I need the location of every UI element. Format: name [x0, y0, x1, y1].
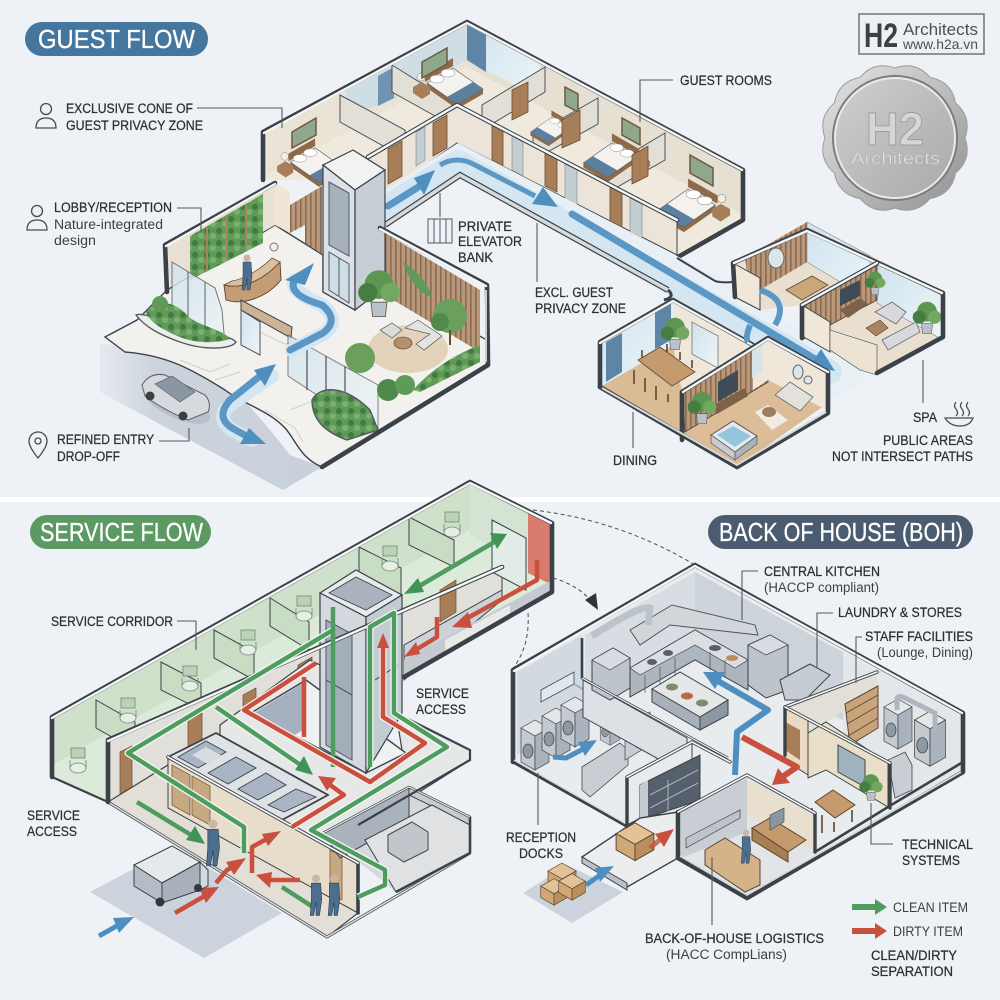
- divider band between guest and service halves: [0, 497, 1000, 502]
- living lounge wall and floor: [682, 338, 827, 460]
- dock: [523, 812, 678, 923]
- label: service access left: ACCESS: [27, 824, 77, 839]
- label: private elevator bank: BANK: [458, 250, 493, 265]
- label: technical systems: TECHNICAL: [902, 837, 973, 852]
- label: refined entry: [29, 428, 189, 464]
- label: refined entry: REFINED ENTRY: [57, 432, 154, 447]
- label: service access left: SERVICE: [27, 808, 80, 823]
- label: staff facilities: STAFF FACILITIES: [865, 629, 973, 644]
- staff dining table: [812, 774, 883, 833]
- arrow: laundry flow: [553, 740, 597, 758]
- icon: elevator: [428, 219, 452, 243]
- arrow: truck approach: [99, 917, 134, 936]
- panel: service flow building: [52, 482, 552, 958]
- kitchen island: [652, 672, 728, 717]
- plants and lounge furniture: [345, 262, 480, 401]
- central floor and courtyard: [220, 660, 470, 850]
- label: reception docks: DOCKS: [519, 846, 563, 861]
- badge: silver seal: H2: [866, 103, 924, 155]
- label: lobby reception: [27, 200, 201, 248]
- dining table: [634, 344, 695, 402]
- bottom L floor and beige wall: [108, 765, 358, 937]
- outer wall tops: [263, 22, 743, 257]
- legend: clean and dirty items: DIRTY ITEM: [893, 924, 963, 939]
- icon: spa bowl with steam: [945, 402, 973, 426]
- label: spa and public areas: PUBLIC AREAS: [883, 433, 973, 448]
- room dividers: [340, 65, 665, 198]
- logo: H2 Architects box: Architects: [903, 20, 978, 39]
- back wall with green wall: [165, 183, 275, 285]
- arrow: dirty item: [852, 923, 887, 939]
- badge: silver seal: [823, 66, 967, 210]
- panel: public areas block (lounge): [733, 222, 943, 375]
- label: service corridor: [51, 614, 196, 650]
- label: exclusive cone zone: [36, 101, 282, 133]
- corridor face wall: [108, 567, 502, 810]
- planter right: [312, 390, 378, 440]
- planter left: [136, 314, 236, 348]
- arrow: corridor flow: [388, 160, 835, 371]
- icon: guest person: [36, 104, 56, 128]
- staff facilities: [785, 673, 945, 798]
- label: service access left: [27, 808, 80, 839]
- icon: receptionist: [27, 206, 47, 230]
- label: laundry and stores: LAUNDRY & STORES: [838, 605, 962, 620]
- tower: [320, 570, 402, 773]
- label: exclusive guest privacy zone: EXCL. GUEST: [535, 285, 613, 300]
- glass front: [172, 262, 225, 345]
- label: private elevator bank: [428, 193, 522, 265]
- label: service access right: ACCESS: [416, 702, 466, 717]
- label: service access right: SERVICE: [416, 686, 469, 701]
- label: lobby reception: design: [54, 233, 96, 248]
- logo: H2 Architects box: H2: [864, 17, 898, 55]
- label: dining: DINING: [613, 453, 657, 468]
- kitchen flow arrows: [703, 672, 797, 785]
- label: technical systems: SYSTEMS: [902, 853, 960, 868]
- lower right plant box: [323, 787, 470, 892]
- label: service access right: [416, 686, 469, 717]
- people: [206, 820, 340, 915]
- label: reception docks: [506, 773, 576, 861]
- label: guest rooms: GUEST ROOMS: [680, 73, 772, 88]
- label: dining: [613, 412, 657, 468]
- green clean path: [128, 533, 507, 907]
- store shelves: [627, 742, 700, 825]
- label: private elevator bank: ELEVATOR: [458, 234, 522, 249]
- plant: dining: [661, 318, 689, 350]
- arrow: dock in: [586, 873, 603, 885]
- arrow: entry flow: [223, 263, 332, 444]
- logo: H2 Architects box: [859, 14, 984, 55]
- label: exclusive guest privacy zone: PRIVACY ZONE: [535, 301, 626, 316]
- panel: public areas block (dining and spa): [600, 300, 828, 467]
- red dirty path: [175, 560, 537, 913]
- label: lobby reception: Nature-integrated: [54, 217, 163, 232]
- dashed link from service flow to back of house: [514, 510, 695, 667]
- beds: [277, 58, 730, 232]
- label: spa and public areas: NOT INTERSECT PATHS: [832, 449, 973, 464]
- road drop-off area: [100, 343, 322, 490]
- label: central kitchen: (HACCP compliant): [764, 580, 879, 595]
- arrow: clean item: [852, 899, 887, 915]
- label: guest rooms: [640, 73, 772, 122]
- label: spa and public areas: SPA: [913, 410, 937, 425]
- elevator tower: [323, 150, 385, 310]
- legend: clean and dirty items: CLEAN ITEM: [893, 900, 968, 915]
- label: service corridor: SERVICE CORRIDOR: [51, 614, 173, 629]
- wood feature wall right: [380, 230, 480, 352]
- beige staff partition: [808, 722, 888, 807]
- badge: silver seal: Architects: [851, 149, 940, 168]
- window room right end: [492, 520, 526, 590]
- lower right wing: [404, 580, 552, 677]
- panel: lobby and reception: [100, 150, 488, 490]
- legend: clean and dirty items: SEPARATION: [871, 964, 953, 979]
- reception desk: [224, 243, 281, 302]
- legend: clean and dirty items: CLEAN/DIRTY: [871, 948, 957, 963]
- lounge furniture: [768, 248, 941, 350]
- toilet fixtures: [70, 512, 460, 773]
- label: staff facilities: [856, 629, 973, 683]
- label: back-of-house logistics: BACK-OF-HOUSE LOGISTICS: [645, 931, 824, 946]
- wall artworks: [292, 48, 713, 186]
- label: lobby reception: LOBBY/RECEPTION: [54, 200, 172, 215]
- label: spa and public areas: [832, 360, 973, 464]
- label: private elevator bank: PRIVATE: [458, 219, 512, 234]
- arrow: dock to office: [650, 838, 662, 848]
- label: technical systems: [871, 803, 973, 868]
- walls: [513, 565, 963, 898]
- label: back-of-house logistics: [645, 857, 824, 962]
- hot tub: [711, 421, 757, 460]
- laundry room: [521, 672, 650, 797]
- panel: back of house plan: [513, 565, 963, 923]
- label: central kitchen: CENTRAL KITCHEN: [764, 564, 880, 579]
- label: refined entry: DROP-OFF: [57, 449, 120, 464]
- office: [678, 775, 815, 898]
- label: staff facilities: (Lounge, Dining): [877, 645, 973, 660]
- delivery truck: [134, 846, 208, 906]
- ground under truck: [90, 847, 282, 958]
- label: central kitchen: [742, 564, 880, 620]
- car: [138, 374, 216, 432]
- title: service flow pill: SERVICE FLOW: [40, 517, 203, 547]
- wing floor and back wall: [52, 482, 552, 802]
- marble floor: [105, 225, 488, 467]
- dividers: [96, 517, 454, 750]
- label: laundry and stores: [817, 605, 962, 667]
- arrowhead of dashed link: [585, 593, 598, 610]
- entrance canopy and glazing: [241, 300, 378, 435]
- title: guest flow pill: GUEST FLOW: [38, 24, 195, 54]
- legend: clean and dirty items: [852, 899, 968, 979]
- label: exclusive guest privacy zone: [535, 223, 626, 316]
- laundry-kitchen wall: [583, 680, 687, 775]
- label: reception docks: RECEPTION: [506, 830, 576, 845]
- corridor wall with doors: [368, 105, 677, 255]
- label: exclusive cone zone: EXCLUSIVE CONE OF: [66, 101, 193, 116]
- label: back-of-house logistics: (HACC CompLians): [666, 947, 787, 962]
- panel: guest rooms wing: [263, 22, 743, 257]
- wing outer walls: [52, 482, 552, 777]
- label: exclusive cone zone: GUEST PRIVACY ZONE: [66, 118, 203, 133]
- building outer walls: [165, 183, 275, 292]
- ledge outline: [358, 713, 470, 825]
- storage rooms: [168, 733, 328, 820]
- kitchen equipment: [592, 605, 830, 730]
- logo: H2 Architects box: www.h2a.vn: [902, 36, 978, 52]
- icon: location pin: [29, 432, 47, 458]
- panel: guest corridor with flow arrows: [385, 143, 870, 403]
